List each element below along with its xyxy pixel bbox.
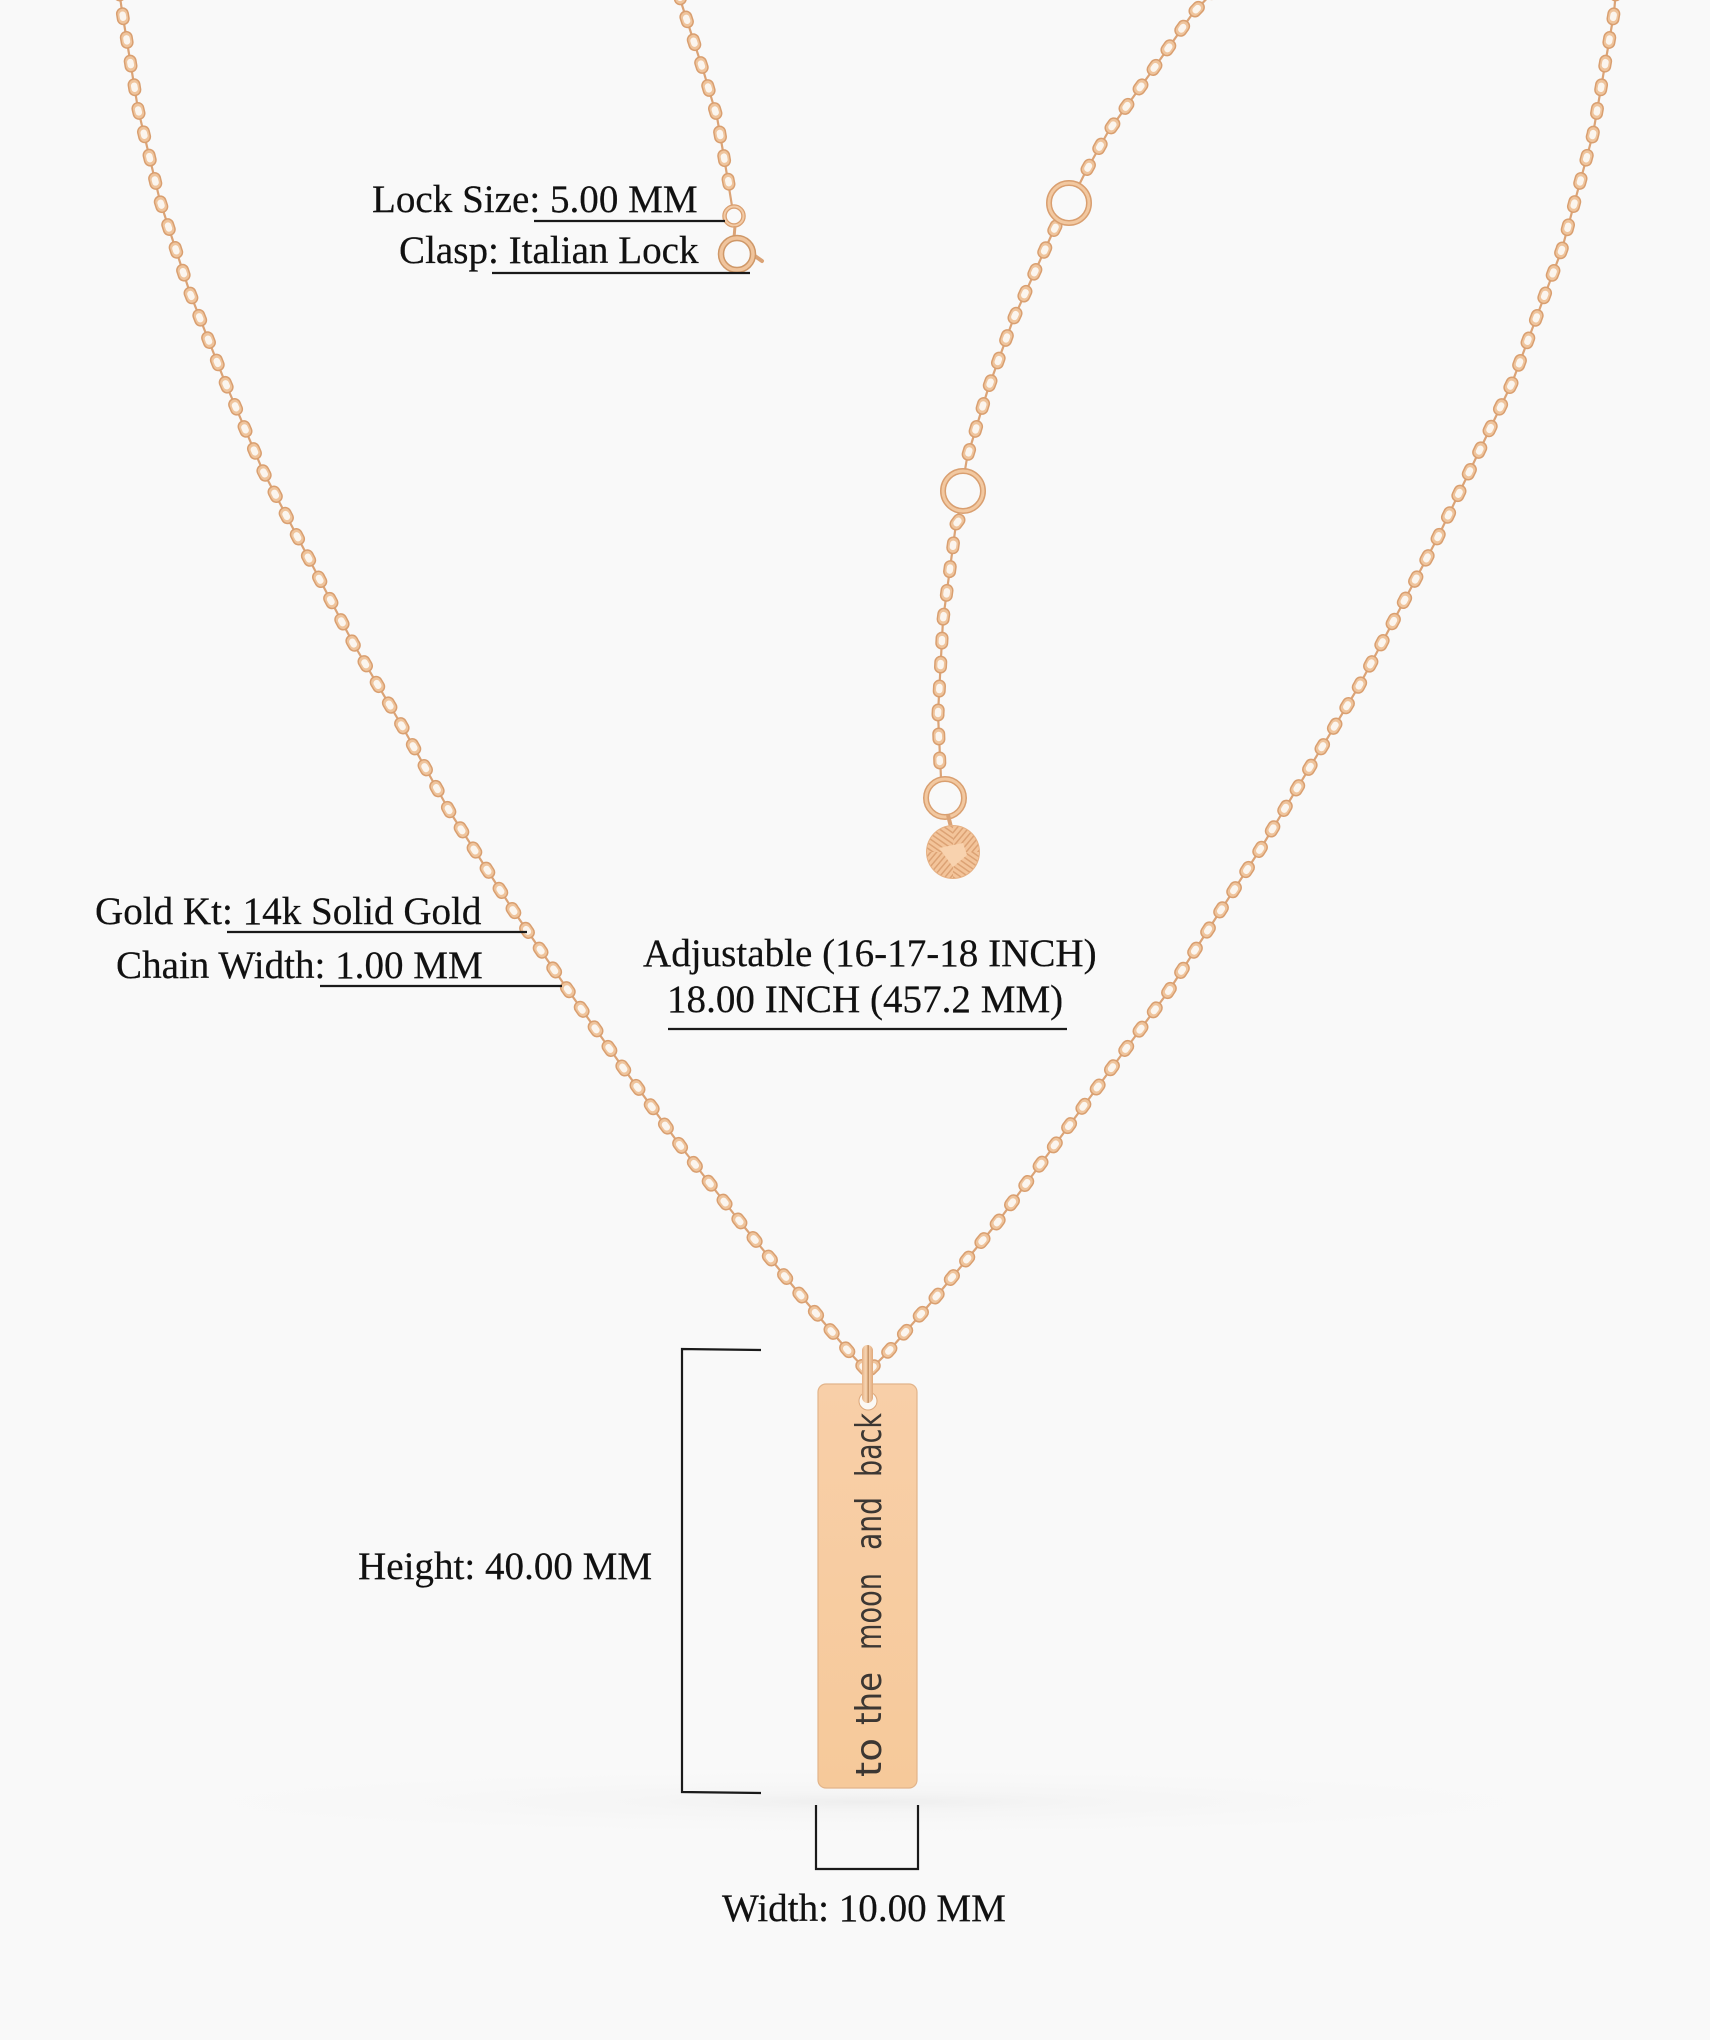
label: lock size: Lock Size: 5.00 MM [372,178,698,221]
width bracket [816,1805,918,1869]
engraved text: the [849,1672,890,1725]
label: width: Width: 10.00 MM [722,1887,1006,1930]
pendant bar [818,1384,917,1788]
label: chain width: Chain Width: 1.00 MM [116,944,483,987]
label: chain length: 18.00 INCH (457.2 MM) [667,978,1063,1021]
label: gold karat: Gold Kt: 14k Solid Gold [95,890,482,933]
engraved text: and [849,1497,890,1550]
pendant hole [859,1392,877,1410]
engraved text: back [849,1413,890,1477]
logo charm disc [925,815,981,880]
engraved text: to [849,1738,890,1777]
engraved text: moon [849,1573,890,1650]
extender ring middle [943,471,983,511]
label: chain length [643,932,1097,1029]
pendant floor shadow [168,1770,1568,1834]
label: clasp: Clasp: Italian Lock [399,229,699,272]
main chain left strand [119,0,866,1370]
extender chain [938,0,1215,778]
lock side chain [679,0,732,206]
clasp: spring ring lock [721,206,762,270]
extender ring upper [1049,183,1089,223]
engraved text [849,1413,890,1777]
main chain right strand [868,0,1616,1372]
height bracket [682,1349,761,1793]
jump ring bail [862,1345,873,1403]
label: height: Height: 40.00 MM [358,1545,652,1588]
label: chain length: Adjustable (16-17-18 INCH) [643,932,1097,975]
extender ring lower [926,779,964,817]
